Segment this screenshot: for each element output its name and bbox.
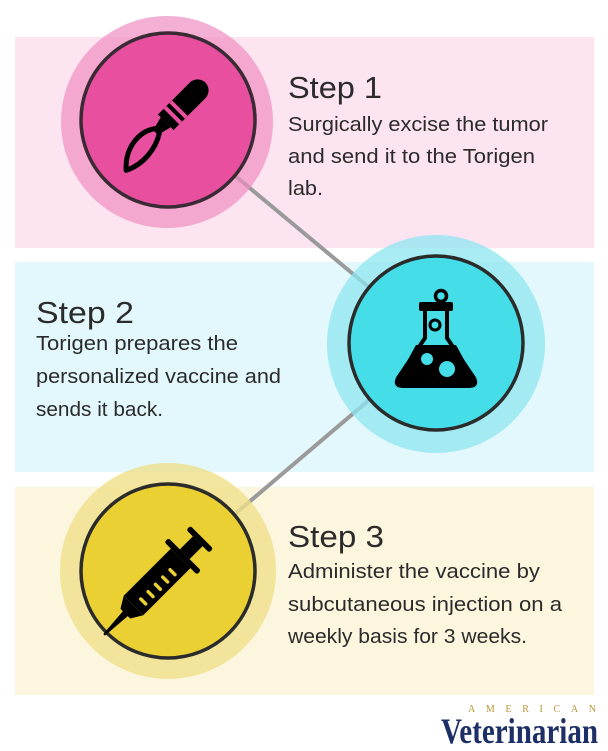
text: step 1: lab. — [288, 178, 323, 200]
text: step 3: Step 3 — [288, 519, 384, 554]
text: step 2: Torigen prepares the — [36, 333, 238, 355]
step 3 circle with syringe icon — [60, 463, 276, 679]
step 1 circle with scalpel icon — [61, 16, 273, 228]
text: step 1: and send it to the Torigen — [288, 146, 535, 168]
text: step 1: Step 1 — [288, 70, 382, 105]
text: step 2: personalized vaccine and — [36, 366, 281, 388]
text: step 3: weekly basis for 3 weeks. — [287, 626, 527, 648]
icon: syringe — [88, 521, 218, 651]
connector lines — [168, 120, 436, 571]
panel: step 1 background — [15, 37, 594, 248]
text: step 2: sends it back. — [36, 399, 163, 421]
text: step 2 — [36, 295, 281, 421]
icon: flask — [397, 290, 475, 386]
text: step 1 — [288, 70, 548, 200]
text: step 3: subcutaneous injection on a — [288, 594, 563, 616]
panel: step 2 background — [15, 262, 594, 472]
text: step 3: Administer the vaccine by — [288, 561, 540, 583]
panel: step 3 background — [15, 487, 594, 695]
text: step 1: Surgically excise the tumor — [288, 114, 548, 136]
step 2 circle with flask icon — [327, 235, 545, 453]
text: step 3 — [287, 519, 563, 648]
logo: American Veterinarian: AMERICAN — [468, 704, 596, 715]
icon: scalpel — [114, 75, 213, 174]
text: step 2: Step 2 — [36, 295, 134, 330]
